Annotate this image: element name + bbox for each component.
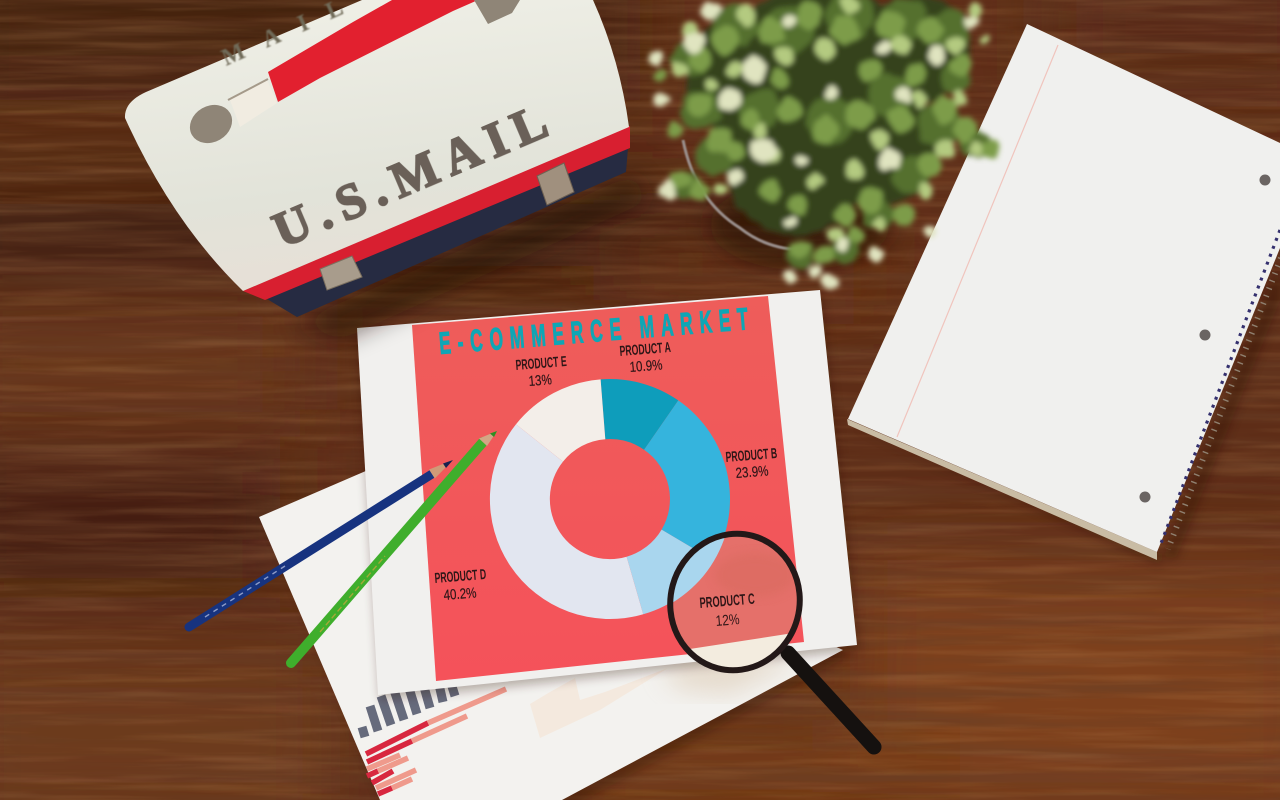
label: product E [515, 353, 567, 389]
magnifier handle [788, 653, 874, 747]
glass pot rim [683, 140, 800, 250]
right handle bracket [474, 0, 520, 24]
label: product E: 13% [528, 371, 553, 389]
plant shadow [710, 180, 890, 270]
icon: blue pencil [189, 460, 453, 627]
label: product C: 12% [715, 611, 740, 629]
label: product C [700, 593, 754, 626]
peach step chart [530, 668, 668, 738]
lunchbox navy base [262, 148, 628, 317]
magnifier lens [673, 536, 797, 668]
left latch [320, 256, 362, 290]
notebook page [848, 24, 1280, 552]
spiral binding [1160, 230, 1280, 549]
lunchbox white lid [125, 0, 629, 291]
label: product A: PRODUCT A [619, 339, 672, 360]
poster: red panel [412, 296, 804, 681]
icon: green pencil [291, 431, 497, 663]
label: product A: 10.9% [629, 356, 663, 375]
donut chart [490, 379, 730, 619]
magnifier rim [655, 519, 815, 685]
lunchbox red stripe [243, 126, 630, 300]
poster title: E-COMMERCE MARKET [438, 302, 750, 361]
label: product B: PRODUCT B [725, 445, 778, 466]
top sheet [357, 290, 860, 700]
gray bar chart [362, 680, 455, 737]
notebook [847, 24, 1280, 565]
foliage [649, 0, 999, 290]
label: product E: PRODUCT E [515, 353, 567, 374]
label: product D: PRODUCT D [434, 566, 487, 587]
U.S. MAIL lettering: U.S.MAIL [264, 92, 555, 258]
red bar chart [366, 689, 506, 794]
red handle [268, 0, 478, 102]
lunchbox [125, 0, 650, 340]
back sheet with small charts [259, 452, 850, 800]
plant [649, 0, 999, 290]
notebook page edge [847, 419, 1157, 560]
label: product D: 40.2% [443, 584, 477, 603]
icon: magnifying glass [667, 530, 882, 754]
label: product D [434, 566, 487, 603]
margin line [897, 45, 1058, 437]
label: product B [725, 445, 778, 481]
handle strap and left bracket [183, 79, 277, 151]
lunchbox shadow [297, 175, 650, 340]
label: product B: 23.9% [735, 462, 769, 481]
label: product A [619, 339, 672, 375]
right latch [537, 163, 574, 205]
punched holes [1140, 174, 1270, 502]
label: product C: PRODUCT C [699, 590, 755, 612]
